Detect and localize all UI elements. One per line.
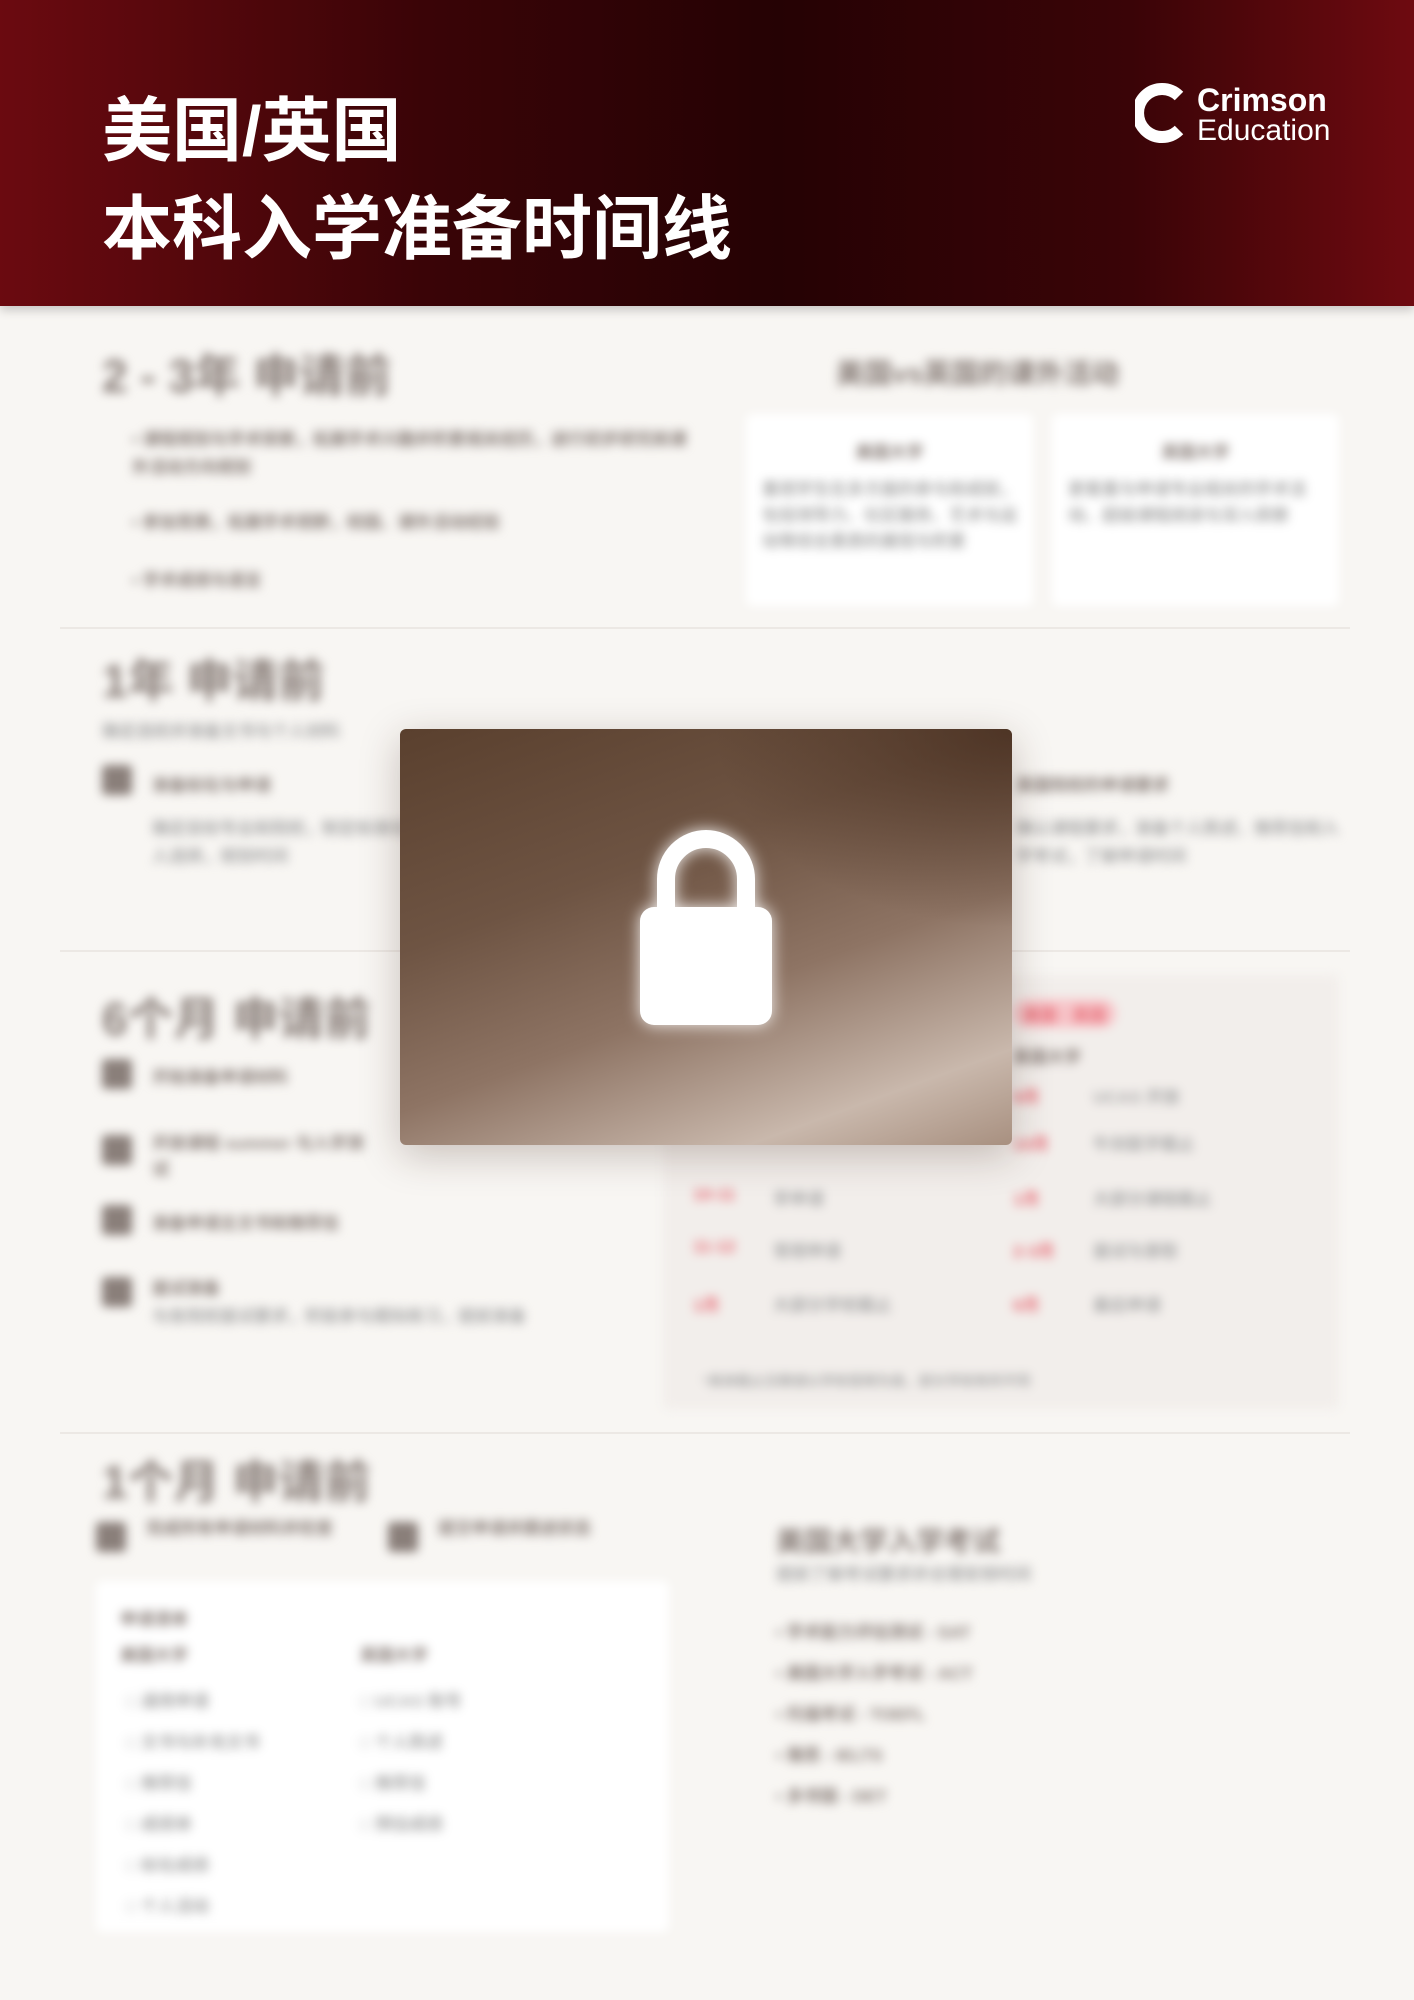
- section: 6 months: 9月: [1013, 1088, 1039, 1107]
- section: 1 month: 英国大学: [360, 1646, 428, 1665]
- section: 2-3 years: 美国vs英国的课外活动: [836, 358, 1119, 389]
- section: 1 year: 确认课程要求，准备个人陈述、推荐信和入学考试，了解申请时间: [1016, 819, 1339, 866]
- section: 1 month: □ UCAS 账号: [360, 1692, 462, 1711]
- section: 6 months: [94, 989, 1220, 1398]
- section: 1 month: □ 推荐信: [360, 1774, 426, 1793]
- section: 1 month: □ 通用申请: [126, 1692, 209, 1711]
- section: 6 months: 大部分学校截止: [773, 1296, 892, 1315]
- section: 1 month: • 美国大学入学考试 - ACT: [776, 1664, 973, 1683]
- section: 1 year: 1年 申请前: [102, 655, 324, 707]
- section: 2-3 years: • 课程规划与学术探索，拓展学术兴趣并积累相关经历，进行初步研究和课外活动方向规划: [132, 430, 687, 477]
- section: 6 months: 最后申请: [1093, 1296, 1161, 1315]
- logo: Education: [1197, 114, 1330, 147]
- section: 6 months: *具体截止日期请以学校官网为准，部分学校有所不同: [703, 1373, 1030, 1389]
- section: 2-3 years: 美国大学: [856, 443, 924, 462]
- section: 6 months: 与各院校面试要求，积极参与模拟练习，提前准备: [152, 1307, 526, 1326]
- section: 1 month: □ 文书与补充文书: [126, 1733, 260, 1752]
- section: 1 month: 提前了解考试要求并合理安排时间: [776, 1565, 1031, 1584]
- section: 6 months: 1月: [693, 1296, 719, 1315]
- section: 6 months: 常规申请: [773, 1242, 841, 1261]
- section: 1 month: 1个月 申请前: [102, 1456, 370, 1508]
- title: 美国/英国: [102, 92, 401, 170]
- section: 6 months: UCAS 开放: [1093, 1088, 1180, 1107]
- section: 6 months: 早申请: [773, 1190, 824, 1209]
- section: 2-3 years: [98, 347, 1336, 604]
- header: [0, 0, 1414, 306]
- section: 1 year: 英国院校的申请要求: [1016, 776, 1169, 795]
- section: 2-3 years: • 参加竞赛，拓展学术视野，校园、课外活动经验: [132, 513, 500, 532]
- section: 6 months: 6个月 申请前: [102, 993, 370, 1045]
- section: 1 month: 提交申请并跟进状态: [438, 1519, 591, 1538]
- section: 1 year: 确定目标专业和院校，制定标准化考试计划，完成初步文书与推荐人选择，规划时间: [152, 819, 645, 866]
- section: 6 months: 开始准备申请材料: [152, 1068, 288, 1087]
- section: 6 months: 面试准备: [152, 1279, 220, 1298]
- section: 2-3 years: 英国大学: [1162, 443, 1230, 462]
- section: 2-3 years: 重视学生在多方面的参与和成就，包括领导力、社区服务、艺术与运动等综合素质的展现与积累: [762, 480, 1017, 551]
- icon: padlock: [628, 818, 784, 1036]
- section: 1 month: 美国大学: [120, 1646, 188, 1665]
- section: 2-3 years: • 学术成绩与语言: [132, 571, 262, 590]
- section: 6 months: 11-12: [693, 1237, 736, 1256]
- lock overlay: [400, 729, 1012, 1145]
- section: 6 months: 面试与录取: [1093, 1242, 1178, 1261]
- title: [102, 92, 732, 268]
- section: 6 months: 10月: [1013, 1135, 1049, 1154]
- section: 1 month: □ 标化成绩: [126, 1856, 209, 1875]
- section: 6 months: 2-3月: [1013, 1242, 1055, 1261]
- logo: [1135, 82, 1330, 147]
- section: 6 months: 6月: [1013, 1296, 1039, 1315]
- section: 6 months: 开放课程 summer 与入学测试: [152, 1134, 364, 1179]
- section: 1 month: 完成所有申请材料并检查: [146, 1519, 333, 1538]
- section: 6 months: 大部分课程截止: [1093, 1190, 1212, 1209]
- section: 1 month: □ 成绩单: [126, 1815, 192, 1834]
- section: 1 year: 准备标化与申请: [152, 776, 271, 795]
- section: 1 month: • 托福考试 - TOEFL: [776, 1705, 925, 1724]
- section: 1 month: □ 个人活动: [126, 1897, 209, 1916]
- section: 1 month: 申请清单: [120, 1610, 188, 1629]
- logo: Crimson: [1197, 82, 1327, 118]
- section: 1 month: • 学术能力评估测试 - SAT: [776, 1623, 971, 1642]
- section: 6 months: 准备申请主文书和推荐信: [152, 1214, 339, 1233]
- section: 1 year: [94, 652, 1340, 868]
- section: 1 month: □ 预估成绩: [360, 1815, 443, 1834]
- title: 本科入学准备时间线: [102, 190, 732, 268]
- section: 1 month: □ 个人陈述: [360, 1733, 443, 1752]
- section: 6 months: 1月: [1013, 1190, 1039, 1209]
- section: 6 months: 英国大学: [1013, 1048, 1081, 1067]
- section: 6 months: 牛剑医学截止: [1093, 1135, 1195, 1154]
- section: 1 month: • 雅思 - IELTS: [776, 1746, 883, 1765]
- section: 1 month: 美国大学入学考试: [776, 1526, 1000, 1557]
- section: 1 month: □ 推荐信: [126, 1774, 192, 1793]
- section: 6 months: 美国 · 英国: [1023, 1006, 1106, 1025]
- section: 1 year: 确定选校并准备文书与个人材料: [102, 722, 340, 741]
- section: 6 months: 10-11: [693, 1185, 736, 1204]
- section: 1 month: [88, 1453, 1035, 1930]
- section: 2-3 years: 2 - 3年 申请前: [102, 350, 391, 402]
- section: 2-3 years: 更看重与申请专业相关的学术活动、超级课程阅读与深入探索: [1068, 480, 1306, 525]
- section: 1 month: • 多邻国 - DET: [776, 1787, 887, 1806]
